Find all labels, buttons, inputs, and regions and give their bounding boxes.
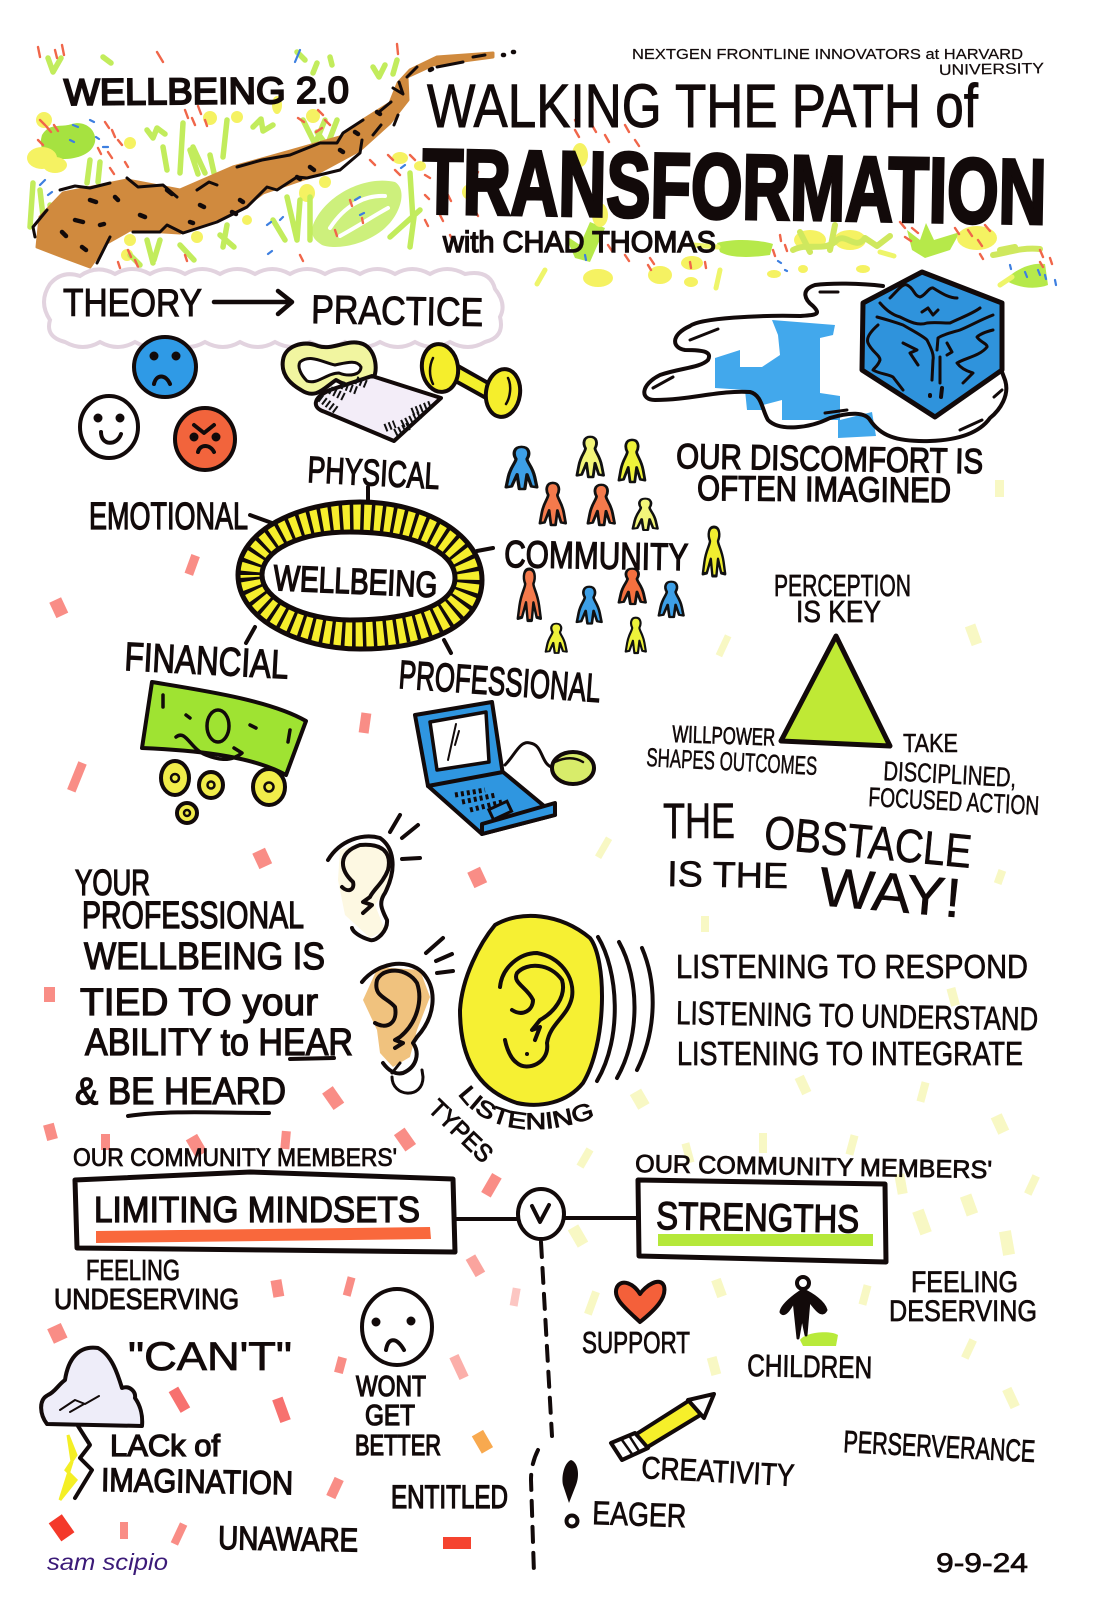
text: take disciplined focused action: TAKE bbox=[903, 728, 958, 758]
icon: storm cloud with lightning bbox=[41, 1348, 142, 1500]
blue water patches bbox=[715, 320, 876, 438]
green highlight bbox=[658, 1234, 873, 1246]
text: willpower shapes outcomes: SHAPES OUTCOMES bbox=[646, 742, 818, 781]
text: take disciplined focused action: DISCIPLINED, bbox=[883, 756, 1017, 793]
green blobs bbox=[41, 123, 1048, 288]
label: won't get better bbox=[355, 1371, 441, 1462]
callout: the obstacle is the way: IS THE bbox=[667, 853, 789, 896]
text: theory: THEORY bbox=[63, 282, 202, 325]
icon: sad blue face bbox=[134, 337, 196, 397]
label: financial: FINANCIAL bbox=[124, 635, 290, 688]
text: can't: "CAN'T" bbox=[128, 1335, 292, 1379]
community people figures bbox=[506, 437, 725, 653]
text: professional wellbeing statement: ABILITY to HEAR bbox=[85, 1022, 353, 1064]
credit line: UNIVERSITY bbox=[939, 60, 1044, 79]
text: professional wellbeing statement: PROFESSIONAL bbox=[82, 895, 304, 937]
label: professional: PROFESSIONAL bbox=[397, 653, 602, 711]
subtitle: with chad thomas: with CHAD THOMAS bbox=[442, 226, 716, 259]
label: feeling deserving: DESERVING bbox=[889, 1295, 1037, 1328]
text: take disciplined focused action bbox=[868, 728, 1040, 821]
icon: melting ice cube bbox=[644, 272, 1006, 441]
label: listening types: TYPES bbox=[423, 1094, 498, 1168]
panel: limiting mindsets bbox=[75, 1172, 455, 1252]
callout: the obstacle is the way bbox=[663, 793, 974, 929]
puddle outline bbox=[644, 284, 1006, 441]
yellow blobs bbox=[27, 96, 997, 287]
text: listening list: LISTENING TO RESPOND bbox=[676, 948, 1028, 985]
header meadow background bbox=[27, 44, 1056, 288]
heading: our community members left: OUR COMMUNITY MEMBERS' bbox=[73, 1144, 397, 1172]
icon: large yellow ear with sound waves bbox=[460, 916, 653, 1105]
orange highlight bbox=[96, 1227, 431, 1243]
label: won't get better: WONT bbox=[356, 1371, 426, 1403]
triangle: perception triad bbox=[781, 636, 890, 746]
cloud: theory to practice bbox=[44, 269, 503, 347]
confetti: coral bbox=[43, 554, 521, 1549]
icon: money and coins bbox=[142, 682, 306, 823]
wellbeing ring diagram bbox=[238, 487, 493, 653]
grass strokes bbox=[30, 52, 420, 265]
icon: exclamation mark bbox=[562, 1460, 578, 1526]
label: children: CHILDREN bbox=[747, 1348, 872, 1385]
text: perception is key bbox=[774, 568, 911, 629]
icon: child figure bbox=[781, 1277, 838, 1346]
text: professional wellbeing statement: & BE HEARD bbox=[75, 1071, 286, 1113]
icon: heart bbox=[616, 1282, 664, 1322]
text: willpower shapes outcomes bbox=[646, 721, 818, 781]
credit line bbox=[632, 46, 1044, 79]
text: practice: PRACTICE bbox=[311, 288, 484, 335]
label: feeling deserving bbox=[889, 1266, 1037, 1328]
label: emotional: EMOTIONAL bbox=[89, 496, 248, 538]
text: professional wellbeing statement: TIED TO your bbox=[80, 982, 318, 1024]
label: listening types bbox=[423, 1085, 594, 1168]
label: won't get better: BETTER bbox=[355, 1430, 441, 1462]
signature: sam scipio bbox=[47, 1549, 168, 1575]
icon: exercise mat bbox=[316, 376, 441, 441]
panel: strengths bbox=[638, 1180, 886, 1262]
label: feeling undeserving: FEELING bbox=[86, 1255, 180, 1287]
label: feeling undeserving: UNDESERVING bbox=[54, 1284, 239, 1316]
text: wellbeing: WELLBEING bbox=[273, 557, 438, 605]
icon: pencil bbox=[611, 1394, 714, 1460]
label: lack of imagination: LACk of bbox=[110, 1428, 220, 1463]
icon: laptop and mouse bbox=[415, 702, 594, 834]
icon: orange ear bbox=[362, 938, 453, 1093]
icon: resistance band bbox=[283, 342, 376, 394]
blue flecks bbox=[40, 50, 1056, 285]
title: walking the path of: WALKING THE PATH of bbox=[427, 72, 979, 140]
credit line: NEXTGEN FRONTLINE INNOVATORS at HARVARD bbox=[632, 46, 1023, 63]
path illustration bbox=[33, 52, 514, 267]
label: lack of imagination: IMAGINATION bbox=[101, 1461, 293, 1501]
label: creativity: CREATIVITY bbox=[641, 1450, 795, 1493]
label: won't get better: GET bbox=[365, 1400, 415, 1432]
text: listening list bbox=[676, 948, 1038, 1072]
connector with check circle bbox=[456, 1189, 637, 1239]
text: strengths: STRENGTHS bbox=[656, 1195, 860, 1242]
icon: happy face bbox=[80, 396, 138, 458]
label: support: SUPPORT bbox=[582, 1325, 690, 1360]
arrow: theory to practice bbox=[214, 291, 292, 314]
text: our discomfort is often imagined: OUR DISCOMFORT IS bbox=[676, 437, 983, 481]
callout: the obstacle is the way: THE bbox=[663, 793, 735, 849]
text: our discomfort is often imagined: OFTEN IMAGINED bbox=[697, 469, 951, 510]
icon: angry red face bbox=[175, 408, 235, 470]
callout: the obstacle is the way: OBSTACLE bbox=[762, 805, 974, 878]
label: entitled: ENTITLED bbox=[391, 1479, 508, 1515]
text: limiting mindsets: LIMITING MINDSETS bbox=[94, 1189, 420, 1230]
event label: wellbeing 2.0: WELLBEING 2.0 bbox=[64, 70, 349, 113]
confetti: faint yellow bbox=[568, 480, 1040, 1409]
label: unaware: UNAWARE bbox=[218, 1519, 359, 1558]
label: community: COMMUNITY bbox=[504, 534, 689, 579]
text: professional wellbeing statement: YOUR bbox=[75, 862, 150, 903]
dashed divider bbox=[531, 1242, 552, 1574]
date: 9-9-24 bbox=[936, 1548, 1028, 1578]
text: perception is key: PERCEPTION bbox=[774, 568, 911, 603]
callout: the obstacle is the way: WAY! bbox=[817, 855, 964, 929]
label: eager: EAGER bbox=[592, 1494, 687, 1534]
text: perception is key: IS KEY bbox=[796, 594, 881, 629]
label: feeling undeserving bbox=[54, 1255, 239, 1316]
label: physical: PHYSICAL bbox=[307, 449, 441, 497]
text: professional wellbeing statement: WELLBEING IS bbox=[84, 936, 325, 978]
red flecks bbox=[38, 44, 1052, 274]
icon: dumbbell bbox=[419, 342, 523, 419]
label: listening types: LISTENING bbox=[458, 1085, 594, 1130]
icon: sad face outline bbox=[362, 1289, 432, 1365]
text: our discomfort is often imagined bbox=[676, 437, 983, 510]
text: professional wellbeing statement bbox=[75, 862, 353, 1116]
label: feeling deserving: FEELING bbox=[911, 1266, 1018, 1299]
heading: our community members right: OUR COMMUNITY MEMBERS' bbox=[635, 1150, 992, 1184]
label: lack of imagination bbox=[101, 1428, 293, 1501]
ice cube bbox=[862, 272, 1002, 417]
text: willpower shapes outcomes: WILLPOWER bbox=[672, 721, 776, 752]
icon: small pale ear bbox=[328, 815, 420, 940]
text: listening list: LISTENING TO INTEGRATE bbox=[677, 1035, 1023, 1072]
